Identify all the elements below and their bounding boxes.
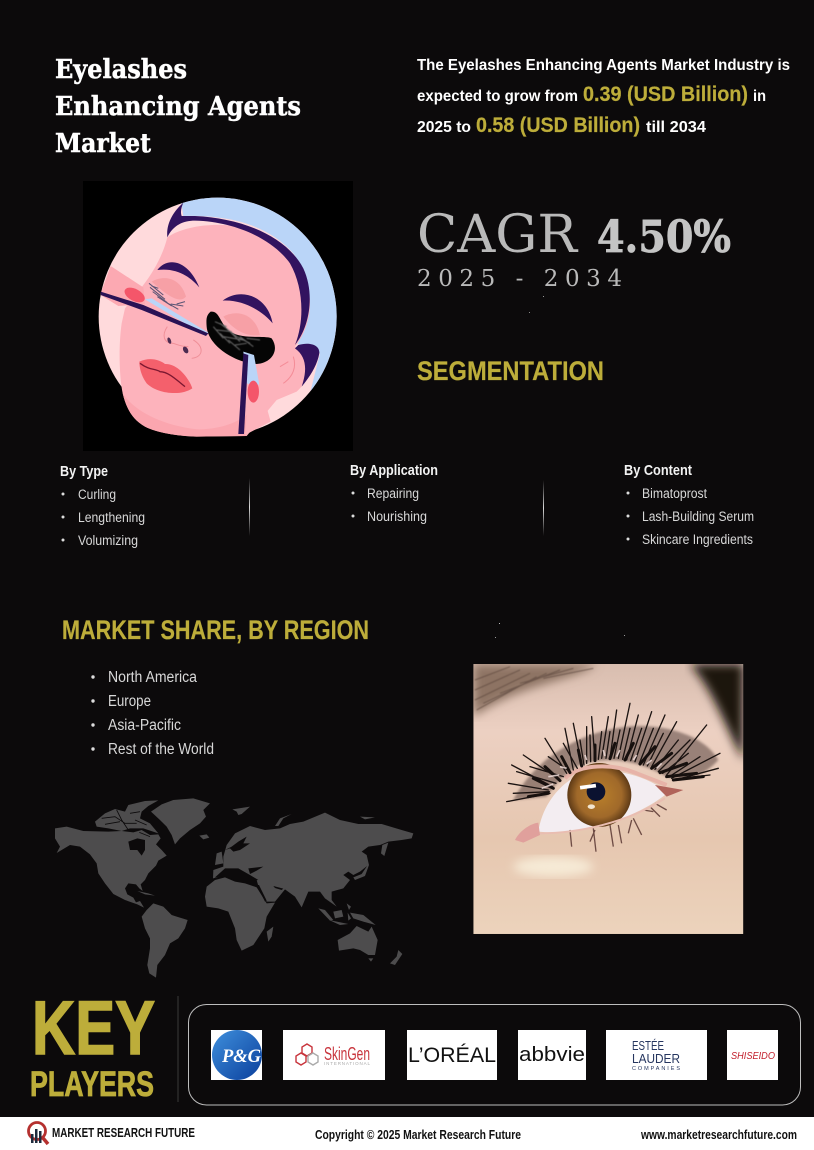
world map	[55, 798, 413, 978]
segment: by application: By Application	[350, 462, 438, 479]
segment: by application: Nourishing	[367, 509, 427, 524]
icon: market research future logo	[28, 1122, 48, 1144]
southeast asia islands	[318, 908, 333, 921]
segment: by content: By Content	[624, 462, 692, 479]
title: Eyelashes	[55, 55, 187, 85]
title: Market	[55, 129, 151, 159]
segment: by type: Volumizing	[78, 533, 138, 548]
eyelids	[152, 278, 186, 300]
lips	[139, 359, 192, 393]
market growth statement: 2025 to	[417, 119, 471, 136]
headband	[180, 193, 347, 393]
market growth statement: The Eyelashes Enhancing Agents Market Industry is	[417, 57, 790, 74]
kamchatka	[381, 843, 388, 856]
region list: Rest of the World	[108, 741, 214, 758]
market growth statement: 0.39 (USD Billion)	[583, 83, 748, 106]
title	[55, 55, 301, 159]
market share heading: MARKET SHARE, BY REGION	[62, 615, 369, 645]
key players heading	[30, 986, 155, 1104]
caribbean islands	[137, 891, 155, 896]
logo: L'Oreal: L’ORÉAL	[408, 1044, 496, 1067]
CAGR figure	[417, 205, 731, 265]
region list: North America	[108, 669, 197, 686]
segment: by application: Repairing	[367, 486, 419, 501]
key players heading: PLAYERS	[30, 1065, 154, 1104]
photo: close-up eye with long lashes	[473, 664, 743, 934]
face skin	[120, 225, 310, 437]
logo: Shiseido	[727, 1030, 778, 1080]
market growth statement: till 2034	[646, 119, 706, 136]
eyebrows	[157, 262, 199, 287]
south america	[142, 903, 188, 978]
logo: SkinGen: SkinGen	[324, 1044, 370, 1064]
footer: Copyright © 2025 Market Research Future	[315, 1127, 521, 1142]
market growth statement: 0.58 (USD Billion)	[476, 114, 640, 137]
arctic islands	[95, 800, 158, 833]
inland seas	[215, 837, 283, 902]
north america	[55, 827, 167, 908]
segment: by type	[60, 463, 145, 548]
logo: P&G	[211, 1030, 262, 1080]
illustration: woman receiving lash extensions	[83, 181, 353, 451]
eurasia	[213, 813, 413, 907]
key players logo panel	[188, 1004, 800, 1105]
key players heading: KEY	[32, 986, 155, 1071]
logo: Estee Lauder: ESTÉE	[632, 1038, 664, 1053]
CAGR period: 2025 - 2034	[417, 266, 622, 292]
iris	[567, 763, 631, 827]
nose	[164, 327, 201, 358]
logo: Estee Lauder: LAUDER	[632, 1052, 680, 1066]
lower lashes	[570, 803, 667, 852]
logo: AbbVie	[518, 1030, 586, 1080]
japan	[353, 855, 369, 880]
segment: by type: Lengthening	[78, 510, 145, 525]
right hand and tweezers	[243, 352, 260, 388]
segment: by content	[624, 462, 754, 547]
segmentation heading: SEGMENTATION	[417, 356, 604, 386]
logo: L'Oreal	[407, 1030, 497, 1080]
tear duct	[515, 823, 540, 843]
madagascar	[267, 927, 273, 942]
greenland	[151, 798, 210, 844]
title: Enhancing Agents	[55, 92, 301, 122]
logo: AbbVie: abbvie	[519, 1044, 585, 1066]
footer	[0, 1117, 814, 1150]
logo: SkinGen	[283, 1030, 385, 1080]
arctic russia islands	[275, 814, 292, 826]
logo: Estee Lauder: COMPANIES	[632, 1066, 680, 1072]
segment: by content: Bimatoprost	[642, 486, 707, 501]
CAGR figure: CAGR	[417, 205, 579, 265]
segment: by type: Curling	[78, 487, 116, 502]
under eye patch	[206, 312, 275, 364]
market growth statement: expected to grow from	[417, 88, 578, 105]
segment: by application	[350, 462, 438, 524]
new zealand	[390, 950, 402, 965]
logo: P&G: P&G	[221, 1046, 261, 1067]
footer: MARKET RESEARCH FUTURE	[52, 1125, 195, 1140]
segment: by content: Lash-Building Serum	[642, 509, 754, 524]
tweezers	[145, 298, 208, 335]
CAGR figure: 4.50%	[597, 212, 731, 263]
upper lashes	[507, 703, 720, 802]
lash shadow	[513, 726, 718, 800]
segment: by type: By Type	[60, 463, 108, 480]
hair line	[167, 203, 310, 345]
region list: Europe	[108, 693, 151, 710]
market growth statement	[417, 57, 790, 137]
region list	[91, 669, 214, 758]
logo: Estee Lauder	[606, 1030, 707, 1080]
europe isles	[215, 852, 223, 865]
left lashes	[149, 283, 185, 309]
logo: SkinGen: INTERNATIONAL	[324, 1061, 370, 1066]
region list: Asia-Pacific	[108, 717, 181, 734]
eye white	[538, 771, 670, 832]
africa	[205, 877, 275, 951]
australia	[338, 926, 378, 955]
market growth statement: in	[753, 88, 766, 105]
iceland	[199, 834, 209, 839]
left hand	[101, 266, 145, 306]
segment: by content: Skincare Ingredients	[642, 532, 753, 547]
logo: Shiseido: SHISEIDO	[731, 1051, 775, 1062]
